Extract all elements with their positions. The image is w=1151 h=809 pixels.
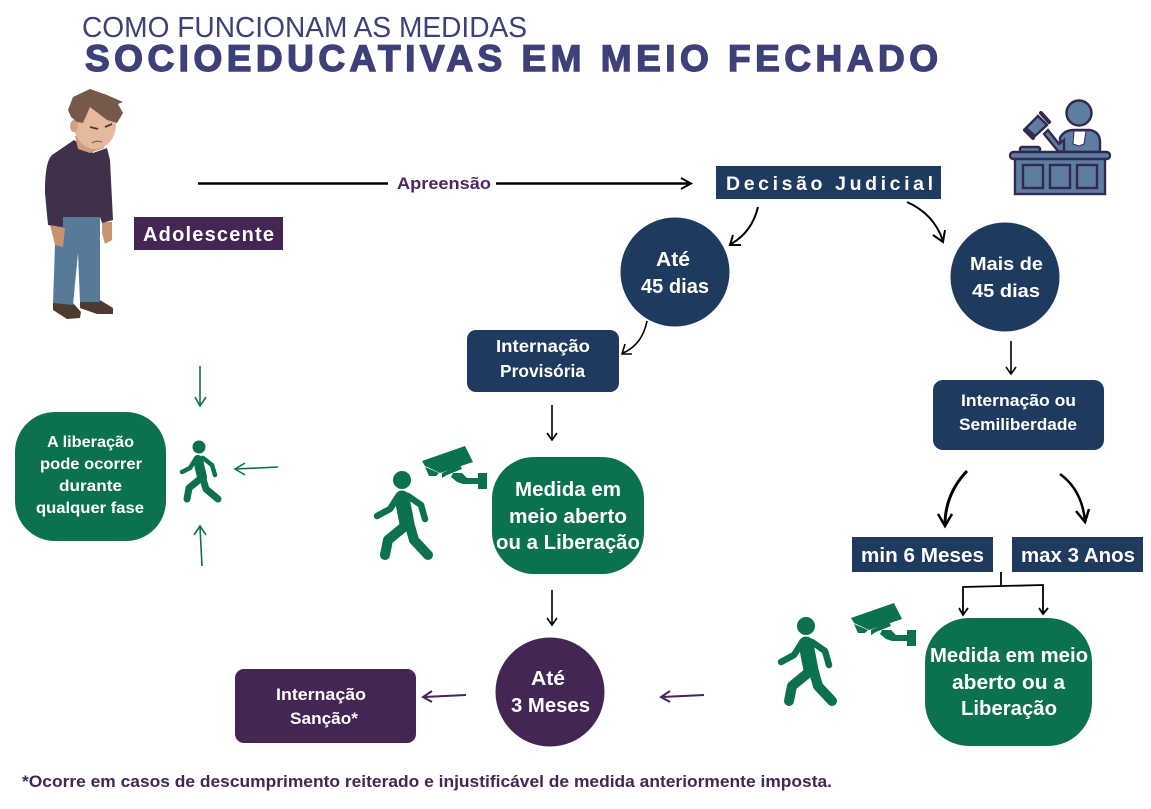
icon: judge at bench: [1010, 100, 1110, 194]
arrow: Apreensão: [198, 174, 691, 193]
box: Internação Provisória: [467, 330, 619, 392]
box: Medida em meio aberto (center): Medida em: [515, 478, 621, 501]
title: SOCIOEDUCATIVAS EM MEIO FECHADO: [85, 38, 938, 79]
arrow: right green: [235, 463, 278, 475]
arrow: bracket to Medida: [959, 572, 1048, 615]
circle: Mais de 45 dias: [950, 222, 1060, 332]
box: Internação ou Semiliberdade: Semiliberdade: [959, 416, 1077, 434]
box: A liberação pode ocorrer: pode ocorrer: [40, 456, 142, 473]
circle: Mais de 45 dias: Mais de: [970, 253, 1043, 274]
box: max 3 Anos: max 3 Anos: [1021, 544, 1135, 567]
arrow: to min 6 meses: [938, 471, 967, 526]
arrow: bottom green: [194, 526, 206, 566]
icon: walking person (center): [377, 471, 428, 555]
label: Adolescente: [134, 217, 283, 250]
box: Internação ou Semiliberdade: [933, 380, 1104, 450]
arrow: top green: [195, 366, 206, 406]
footnote: *Ocorre em casos de descumprimento reiterado e injustificável de medida anteriormente imposta.: [22, 773, 832, 791]
arrow: to Internação Provisória: [622, 321, 647, 354]
circle: Até 3 Meses: 3 Meses: [511, 695, 590, 717]
box: max 3 Anos: [1012, 537, 1143, 572]
box: Internação Provisória: Internação: [496, 336, 590, 356]
icon: walking person (right): [781, 617, 832, 701]
arrow: right Medida to 3 Meses: [661, 691, 704, 702]
circle: Até 3 Meses: Até: [531, 668, 565, 690]
icon: sad adolescent boy: [45, 89, 123, 319]
title: COMO FUNCIONAM AS MEDIDAS: [82, 12, 527, 44]
box: min 6 Meses: [852, 537, 993, 572]
title: [82, 12, 938, 79]
box: Medida em meio aberto (center): [492, 457, 644, 574]
box: Internação Provisória: Provisória: [500, 361, 585, 381]
box: Medida em meio aberto (right): aberto ou a: [952, 672, 1066, 694]
box: A liberação pode ocorrer: [15, 412, 166, 541]
arrow: 3 Meses to Internação Sanção: [423, 691, 466, 702]
box: Decisão Judicial: Decisão Judicial: [726, 173, 933, 195]
box: min 6 Meses: min 6 Meses: [861, 544, 984, 567]
circle: Mais de 45 dias: 45 dias: [972, 280, 1040, 301]
icon: walking person (left): [182, 440, 218, 499]
box: A liberação pode ocorrer: durante: [59, 478, 122, 495]
box: Internação ou Semiliberdade: Internação ou: [961, 392, 1076, 410]
circle: Até 3 Meses: [496, 638, 604, 746]
arrow: Apreensão: Apreensão: [397, 174, 491, 193]
label: Adolescente: Adolescente: [143, 224, 274, 246]
circle: Até 45 dias: Até: [656, 249, 690, 271]
icon: security camera (center): [422, 446, 487, 489]
box: Medida em meio aberto (right): Liberação: [961, 698, 1057, 720]
box: Internação Sanção: Sanção*: [290, 710, 359, 728]
arrow: to max 3 anos: [1060, 474, 1089, 522]
box: Medida em meio aberto (right): [925, 618, 1092, 746]
arrow: to Medida em meio aberto: [547, 405, 557, 440]
circle: Até 45 dias: 45 dias: [641, 276, 709, 298]
box: Medida em meio aberto (center): meio aberto: [509, 505, 627, 528]
box: Internação Sanção: [235, 669, 416, 743]
box: Medida em meio aberto (center): ou a Liberação: [496, 531, 640, 554]
arrow: decision to more than 45 days: [907, 202, 945, 242]
box: Medida em meio aberto (right): Medida em meio: [930, 645, 1088, 667]
box: Internação Sanção: Internação: [276, 686, 366, 704]
arrow: decision to up to 45 days: [730, 207, 758, 245]
box: Decisão Judicial: [716, 166, 941, 199]
icon: security camera (right): [851, 603, 916, 646]
circle: Até 45 dias: [620, 218, 730, 326]
arrow: to Internação ou Semiliberdade: [1006, 341, 1016, 374]
box: A liberação pode ocorrer: qualquer fase: [36, 500, 144, 517]
box: A liberação pode ocorrer: A liberação: [47, 434, 134, 451]
arrow: center Medida to 3 Meses: [547, 590, 557, 625]
